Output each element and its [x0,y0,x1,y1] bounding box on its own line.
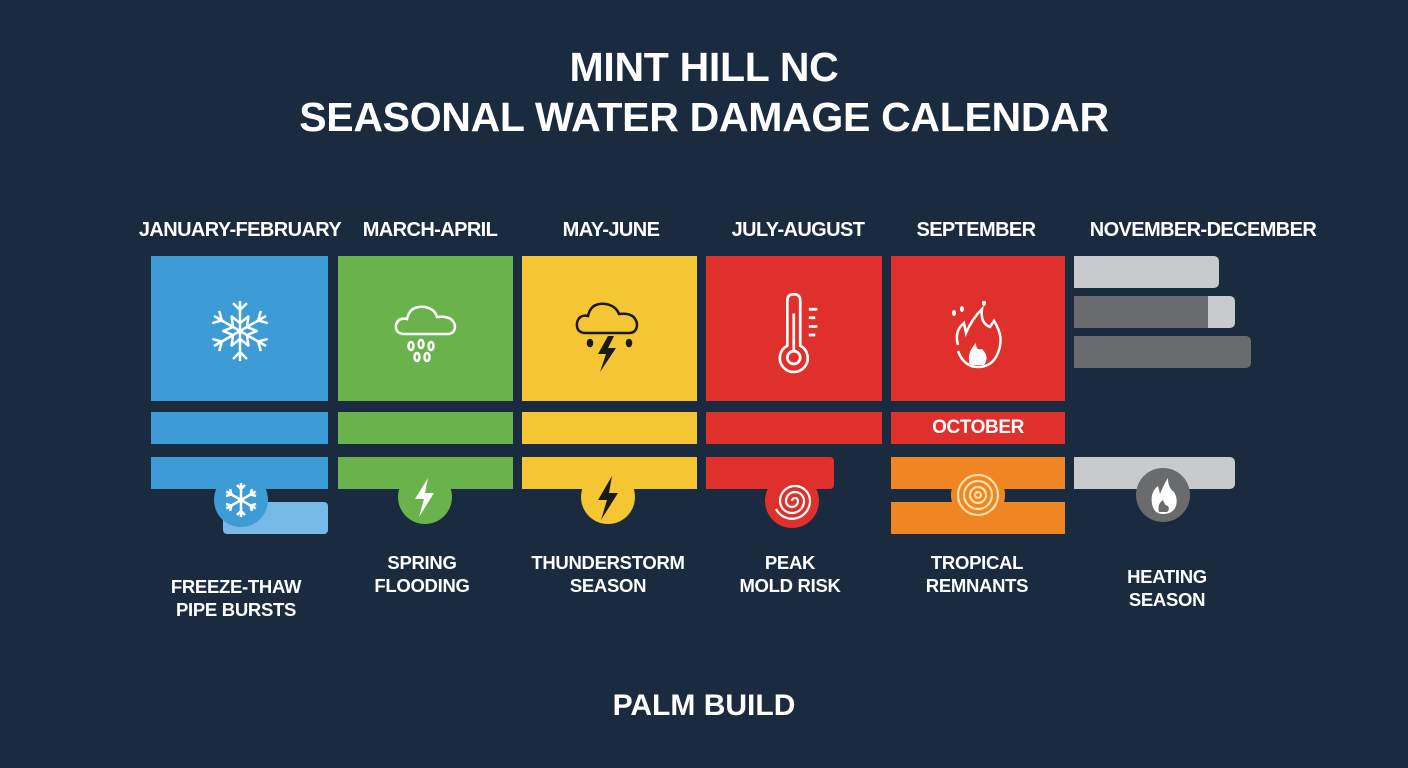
captions: SEASON [1129,589,1205,610]
october bar: OCTOBER [932,417,1024,438]
title: MINT HILL NC [570,44,838,90]
icon: mold spiral circle [765,474,819,528]
panel: january-february [151,256,328,534]
captions: SEASON [570,575,646,596]
panel: november-december [1074,256,1251,522]
footer brand: PALM BUILD [613,689,795,722]
icon: storm cloud [576,302,638,372]
icon: snowflake [212,301,268,361]
column labels: JANUARY-FEBRUARY [139,219,341,241]
captions [171,552,1207,620]
title [299,44,1109,140]
panel: september-october [891,256,1065,534]
captions: MOLD RISK [739,575,841,596]
column labels: MARCH-APRIL [363,219,497,241]
captions: HEATING [1127,566,1207,587]
icon: thermometer [778,292,818,374]
icon: orange spiral circle [951,468,1005,522]
icon: rain cloud [394,306,456,362]
panel: march-april [338,256,513,524]
column labels [139,219,1316,241]
icon: snowflake circle [214,473,268,527]
column labels: MAY-JUNE [563,219,659,241]
column labels: SEPTEMBER [916,219,1036,241]
panel: july-august [706,256,882,528]
captions: THUNDERSTORM [531,552,685,573]
captions: FLOODING [374,575,470,596]
captions: SPRING [387,552,457,573]
captions: PEAK [765,552,815,573]
icon: lightning circle [398,470,452,524]
icon: flame circle [1136,468,1190,522]
title: SEASONAL WATER DAMAGE CALENDAR [299,94,1109,140]
panel: may-june [522,256,697,524]
captions: PIPE BURSTS [176,599,296,620]
column labels: JULY-AUGUST [732,219,864,241]
captions: TROPICAL [931,552,1023,573]
icon: lightning circle dark [581,470,635,524]
column labels: NOVEMBER-DECEMBER [1090,219,1316,241]
icon: flame with drops [952,301,1002,368]
october bar [891,412,1065,444]
captions: REMNANTS [926,575,1028,596]
captions: FREEZE-THAW [171,576,301,597]
